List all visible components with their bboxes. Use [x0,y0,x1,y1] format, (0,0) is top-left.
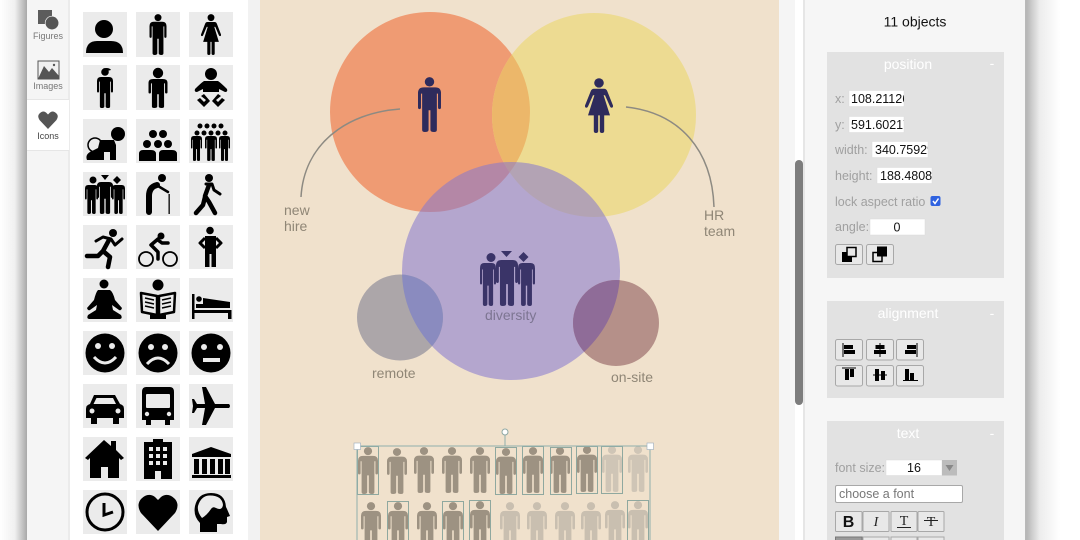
button: bold [836,512,862,532]
circle: yellow [492,13,696,217]
icon: walking person [196,174,220,213]
button: underline [891,512,917,532]
icon: diversity group [480,251,535,306]
window shadow left [0,0,27,540]
icon: crowd [191,124,230,161]
icon: neutral face [192,334,230,372]
icon: person hands on hips [200,227,221,267]
field: x: x: [835,92,845,106]
field: y: 591.60217 [851,118,910,132]
button: italic [863,512,889,532]
panel: text: - [990,425,995,441]
button: bring forward [836,244,862,264]
field: choose a font [836,486,962,502]
icon: cyclist [139,232,177,266]
label: new hire: hire [284,218,308,234]
circle overlap: on-site and diversity [573,280,620,352]
icon: head with brain [195,493,230,532]
icon: person reading newspaper [141,280,175,319]
tab: icons [37,111,59,141]
field: width: width: [834,143,868,157]
panel: position [827,52,1004,278]
button: bold: B [843,514,854,531]
icon: elderly person [149,174,170,214]
circle: on-site [573,280,659,366]
selection boxes [358,446,648,540]
button row cut off at bottom [836,537,944,540]
panel: position: - [990,55,995,71]
button: strikethrough [918,512,944,532]
icon: happy face [86,334,124,372]
icon: airplane [192,387,230,425]
selection frame and handles [354,429,654,540]
field: y: y: [835,118,845,132]
icon: diverse group [85,175,125,214]
circle overlap: remote and diversity [402,274,443,346]
field: height [835,168,932,184]
icon: group of people [139,130,177,161]
button: align left [836,340,862,360]
arrow: new hire [301,109,400,197]
tab: images [33,61,63,91]
field: height: 188.4808 [880,169,932,183]
people: bottom row [361,501,648,540]
label: new hire: new [284,202,311,218]
panel: properties [805,0,1026,540]
field: font size: font size: [835,461,885,475]
icon: boy [148,68,168,108]
icon: woman on yellow circle [585,78,613,133]
panel: alignment: - [990,305,995,321]
label: HR team: HR [704,207,724,223]
tab: images: Images [33,81,63,91]
icon: bed [192,294,232,319]
button: align bottom [896,366,924,386]
panel: text [827,421,1004,540]
button: align center [866,340,894,360]
label: remote: remote [372,365,416,381]
button: send backward [866,244,894,264]
field: width: 340.75929 [875,143,934,157]
icon: car [86,395,124,424]
field: width [834,142,934,158]
icon: user [86,20,123,53]
icon: baby [195,68,227,107]
scrollbar [795,0,805,540]
circle: purple [402,162,620,380]
label: HR team: team [704,223,735,239]
icon: bus [142,387,174,425]
field: x: 108.21126 [851,92,909,106]
icon: clock [87,494,123,530]
circle: orange [330,12,530,212]
field: font size: 16 [907,461,921,475]
button: align middle [866,366,894,386]
label: diversity: diversity [485,307,536,323]
arrow: HR team [626,107,714,207]
people: top row [358,446,648,494]
icon: crawling baby [86,127,125,160]
icon: person with hair [97,68,113,108]
field: angle: angle: [835,220,869,234]
button: strikethrough: T [927,515,936,530]
icon: heart [138,495,178,531]
tab: icons: Icons [37,131,59,141]
icon: office building [144,439,172,479]
tab: figures [33,10,64,41]
button: align top [836,366,862,386]
panel: venn diagram [284,12,735,385]
text: object count: 11 objects [884,14,946,30]
button: underline: T [900,514,909,529]
field: angle: 0 [894,220,901,234]
panel: icon library [70,0,260,540]
label: on-site: on-site [611,369,653,385]
icon: house [85,440,124,478]
heading: alignment: alignment [878,305,938,321]
icon: woman [201,14,221,55]
circle: remote [357,274,443,360]
heading: text: text [897,425,919,441]
heading: position: position [884,56,932,72]
selected people row [354,429,654,540]
field: x [835,90,909,106]
button: align right [896,340,924,360]
field: choose a font: choose a font [839,487,915,501]
icon: meditating person [87,280,122,319]
tab: figures: Figures [33,31,64,41]
icon: man on orange circle [418,77,441,132]
window shadow right [1026,0,1060,540]
field: font size [835,460,957,476]
panel: sidebar tabs [27,0,70,540]
field: height: height: [835,169,873,183]
field: y [835,116,910,132]
field: angle [835,219,925,235]
icon: sad face [138,334,178,372]
panel: canvas [260,0,795,540]
panel: alignment [827,301,1004,398]
circle overlap: orange and yellow [492,54,530,172]
icon: bank [192,447,231,478]
icon: running person [87,229,122,267]
field: lock aspect ratio: lock aspect ratio [835,195,925,209]
button: italic: I [873,515,880,530]
icon: man [150,14,166,55]
